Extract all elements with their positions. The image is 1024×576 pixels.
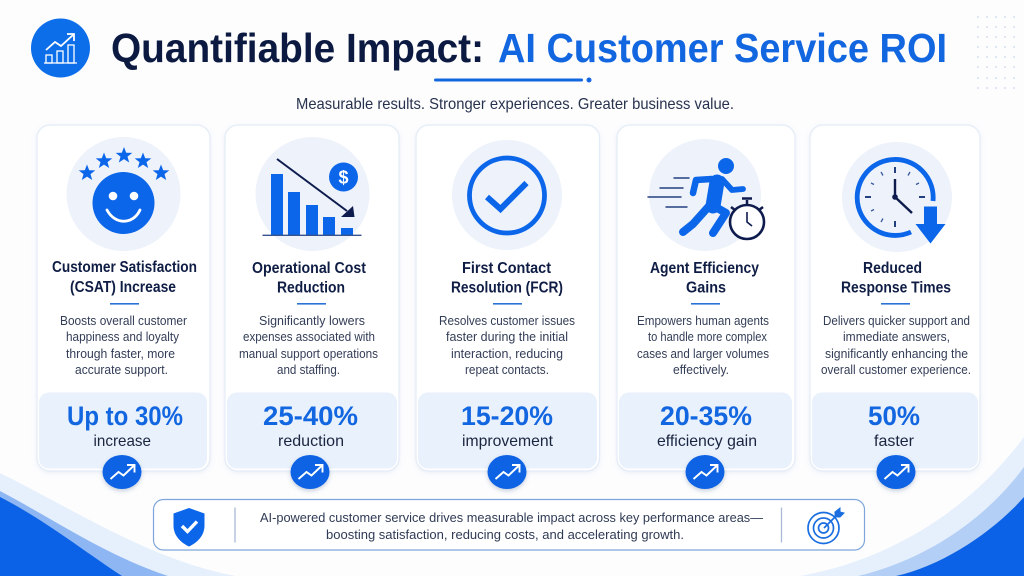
stat box <box>418 392 597 468</box>
stat box <box>227 392 397 468</box>
description: Boosts overall customer <box>60 314 187 328</box>
description: repeat contacts. <box>465 363 549 377</box>
description: cases and larger volumes <box>637 347 769 361</box>
panel: first contact resolution <box>416 125 600 489</box>
description <box>60 314 187 377</box>
description: Delivers quicker support and <box>823 314 970 328</box>
description: and staffing. <box>277 363 340 377</box>
description: manual support operations <box>239 347 378 361</box>
description <box>637 314 769 377</box>
panel: response times <box>810 125 980 489</box>
description: effectively. <box>673 363 729 377</box>
heading: Customer Satisfaction <box>52 259 197 276</box>
description: Resolves customer issues <box>439 314 575 328</box>
heading: Gains <box>686 280 726 296</box>
icon: clock with down arrow <box>842 142 952 252</box>
subtitle: Measurable results. Stronger experiences. Greater business value. <box>296 96 734 113</box>
icon: falling cost bars <box>256 137 370 251</box>
description: expenses associated with <box>243 330 375 344</box>
stat box: 25-40% <box>263 401 358 431</box>
icon: trend badge <box>102 455 142 489</box>
icon: target <box>808 508 844 544</box>
heading <box>451 260 563 296</box>
stat box: reduction <box>278 433 344 450</box>
description: happiness and loyalty <box>66 330 180 344</box>
description: immediate answers, <box>843 330 950 344</box>
heading <box>841 260 951 296</box>
callout text <box>260 510 763 542</box>
heading: Operational Cost <box>252 260 366 277</box>
decorative dots <box>977 16 1015 89</box>
description: Significantly lowers <box>259 314 365 328</box>
description: overall customer experience. <box>821 363 971 377</box>
icon: falling cost bars: $ <box>338 168 349 188</box>
icon: trend badge <box>488 455 526 489</box>
description <box>239 314 378 377</box>
description: through faster, more <box>66 347 175 361</box>
heading: Resolution (FCR) <box>451 280 563 296</box>
heading: Agent Efficiency <box>650 260 759 277</box>
callout text: boosting satisfaction, reducing costs, and accelerating growth. <box>326 527 684 542</box>
title underline <box>434 78 592 82</box>
description: interaction, reducing <box>451 347 563 361</box>
description: Empowers human agents <box>637 314 769 328</box>
callout text: AI-powered customer service drives measurable impact across key performance areas— <box>260 510 763 525</box>
title <box>111 25 947 71</box>
stat box: 20-35% <box>660 401 752 431</box>
description: accurate support. <box>75 363 168 377</box>
heading: (CSAT) Increase <box>70 279 176 296</box>
icon: shield check <box>174 508 204 546</box>
heading <box>52 259 197 296</box>
heading: Response Times <box>841 280 951 296</box>
stat box: improvement <box>462 433 554 450</box>
panel: agent efficiency <box>617 125 795 489</box>
icon: trend badge <box>290 455 330 489</box>
stat box: efficiency gain <box>657 433 757 450</box>
icon: trend badge <box>876 455 916 489</box>
right bottom wave <box>800 437 1024 576</box>
description: to handle more complex <box>648 330 768 344</box>
description: significantly enhancing the <box>825 347 968 361</box>
icon: smiley with stars <box>66 137 180 251</box>
stat box: 15-20% <box>461 401 553 431</box>
icon: trend badge <box>686 455 724 489</box>
panel: customer satisfaction <box>37 125 210 489</box>
icon: growth chart logo <box>31 18 90 78</box>
title: Quantifiable Impact: <box>111 25 484 71</box>
icon: runner with stopwatch <box>648 139 764 251</box>
stat box: increase <box>94 433 151 450</box>
stat box <box>619 392 792 468</box>
callout <box>154 500 864 550</box>
stat box <box>39 392 207 468</box>
heading <box>252 260 366 296</box>
stat box <box>812 392 978 468</box>
title: AI Customer Service ROI <box>498 25 947 71</box>
description <box>821 314 971 377</box>
stat box: Up to 30% <box>67 401 183 431</box>
heading: First Contact <box>462 260 551 277</box>
heading <box>650 260 759 296</box>
stat box: faster <box>874 433 915 450</box>
icon: check circle <box>452 140 562 250</box>
left bottom wave <box>0 473 236 576</box>
panel: operational cost <box>225 125 399 489</box>
stat box: 50% <box>868 401 920 431</box>
heading: Reduced <box>863 260 922 277</box>
description: faster during the initial <box>446 330 568 344</box>
description <box>439 314 575 377</box>
heading: Reduction <box>277 280 345 296</box>
